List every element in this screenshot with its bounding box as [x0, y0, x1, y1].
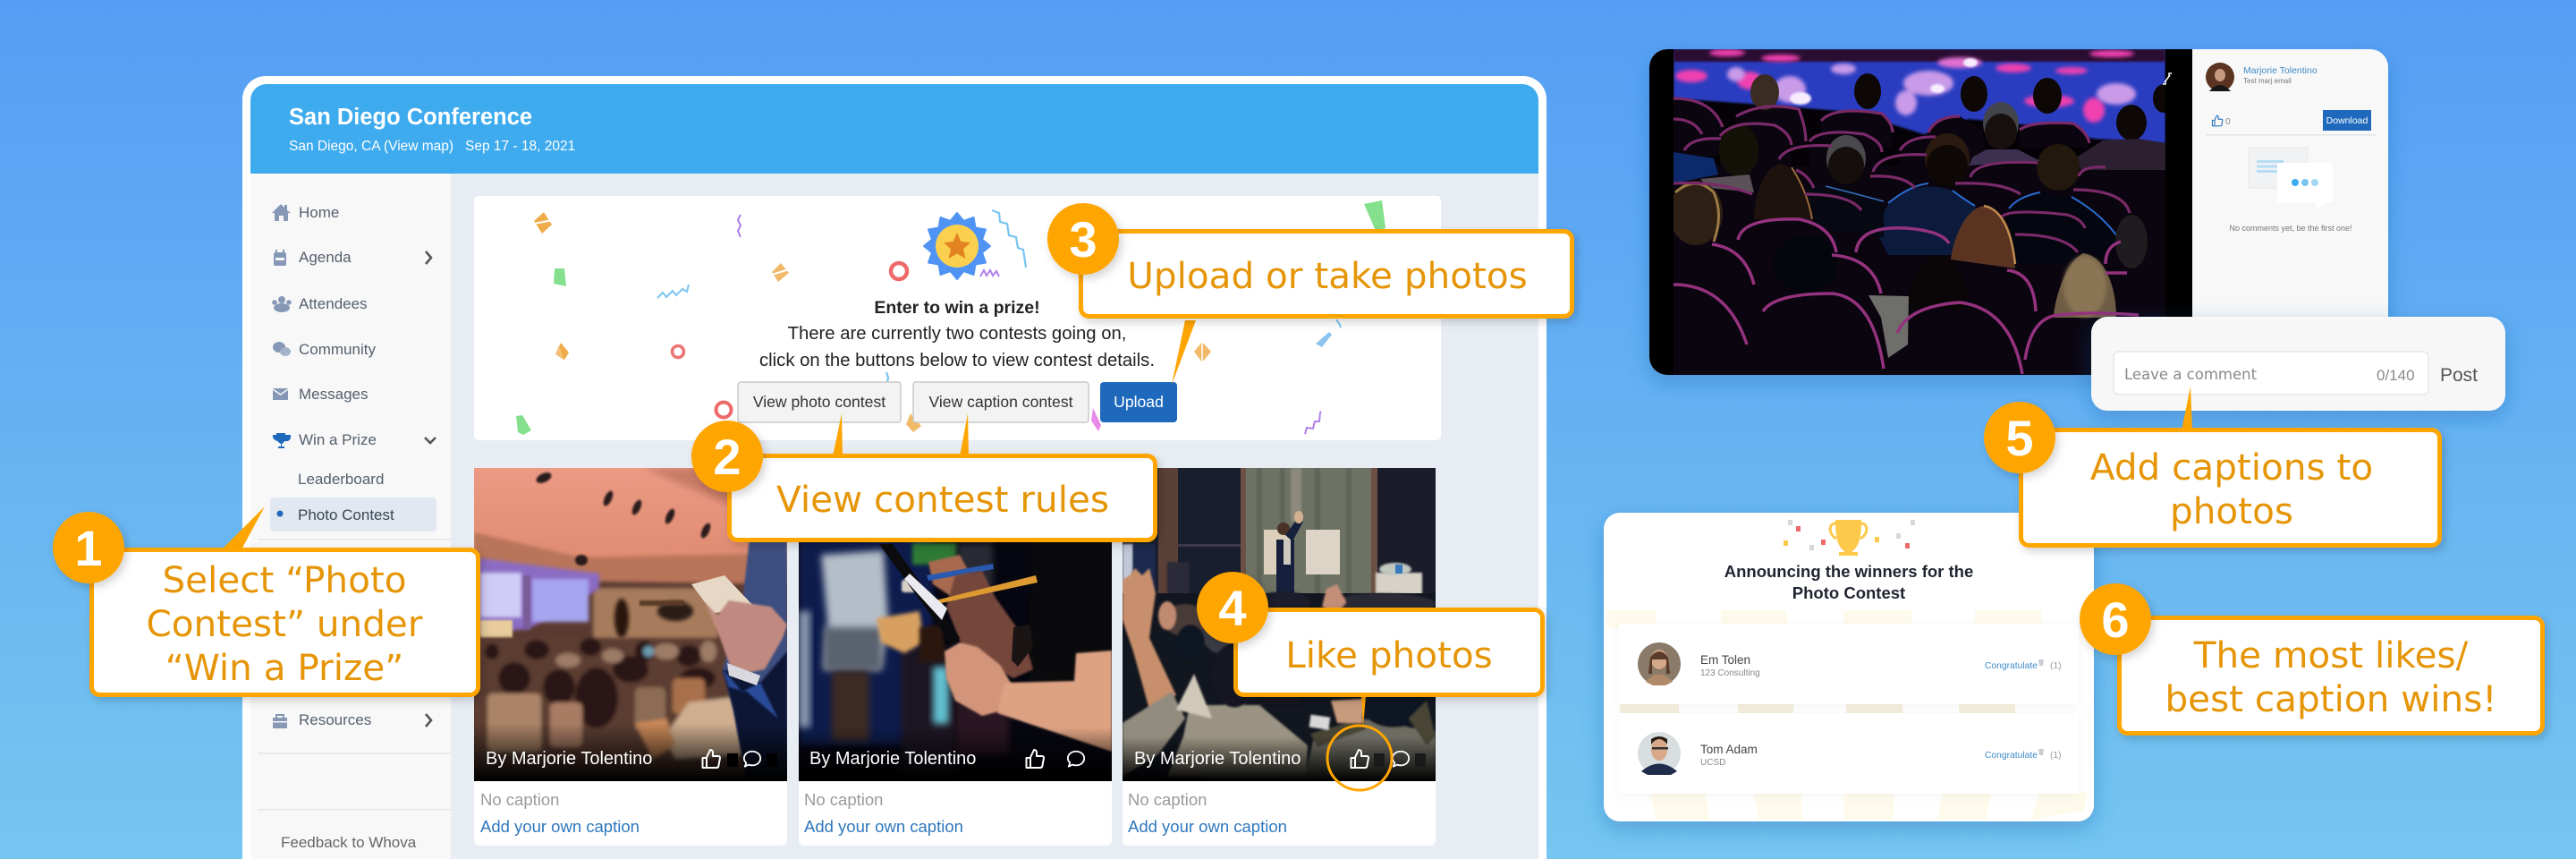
long hair and near heads: [1754, 164, 1812, 221]
photo: audience in theatre: [1674, 49, 2165, 375]
viewer sidebar: Marjorie Tolentino: [2243, 65, 2318, 76]
sidebar navigation: Attendees: [299, 295, 368, 312]
callout 2: view contest rules: [691, 413, 1156, 540]
panel: comment box: Leave a comment: [2124, 366, 2258, 383]
callout 3: upload or take photos: Upload or take photos: [1127, 254, 1528, 297]
callout 1: select photo contest: [53, 506, 478, 694]
sidebar navigation: Resources: [299, 711, 371, 728]
credit and actions: [1134, 749, 1426, 769]
viewer sidebar: 0: [2225, 117, 2231, 127]
icon: prize badge: [924, 213, 990, 279]
panel: conference app window: [242, 76, 1546, 859]
callout 4: like photos: [1197, 572, 1542, 790]
icon: trophy with confetti: [1784, 520, 1915, 556]
avatar: [1638, 732, 1681, 775]
winner row: Tom Adam: Congratulate: [1985, 751, 2038, 761]
callout 1: select photo contest: 1: [74, 520, 103, 576]
photo: writing on a clipboard: [799, 542, 1112, 781]
panel: photo viewer: [1649, 49, 2388, 375]
avatar: [1638, 642, 1681, 685]
callout 6: most likes wins: 6: [2101, 591, 2130, 648]
heads back rows: [1854, 73, 2174, 140]
photo card 3: Add your own caption: [1128, 817, 1287, 836]
callout 4: like photos: 4: [1218, 580, 1247, 636]
photo card 1: Add your own caption: [480, 817, 640, 836]
callout 5: add captions: photos: [2170, 489, 2293, 532]
shoulders: [1879, 186, 1978, 255]
sidebar navigation: Leaderboard: [298, 471, 384, 488]
button: view caption contest: View caption contest: [928, 393, 1073, 411]
seat arcs: [1674, 98, 2130, 252]
credit and actions: By Marjorie Tolentino: [809, 749, 976, 769]
photo card 3: No caption: [1128, 790, 1207, 809]
callout 2: view contest rules: View contest rules: [776, 478, 1109, 521]
app header: [250, 84, 1538, 174]
credit and actions: By Marjorie Tolentino: [1134, 749, 1301, 769]
heading: Announcing the winners for the: [1724, 562, 1973, 581]
sidebar navigation: Home: [299, 204, 339, 221]
winner row: Tom Adam: Tom Adam: [1700, 743, 1758, 756]
button: upload: Upload: [1114, 393, 1164, 411]
avatar: [2206, 63, 2234, 91]
callout 4: like photos: Like photos: [1285, 634, 1493, 676]
viewer sidebar: [2206, 63, 2377, 233]
photo card 1: No caption: [480, 790, 559, 809]
credit and actions: [809, 749, 1084, 769]
viewer sidebar: Test marj email: [2243, 77, 2292, 85]
photo: conference hall with phone: [474, 468, 787, 781]
callout 3: upload or take photos: [1047, 203, 1572, 385]
winner row: Tom Adam: [1619, 713, 2079, 794]
app header: San Diego, CA (View map): [289, 139, 453, 154]
panel: comment box: [2091, 317, 2505, 411]
decorative stripes: [1606, 610, 2088, 820]
sidebar navigation: Agenda: [299, 249, 352, 266]
callout 1: select photo contest: Contest” under: [147, 602, 423, 645]
app content background: [250, 170, 1538, 859]
winner row: Em Tolen: (1): [2050, 661, 2062, 671]
callout 5: add captions: 5: [2005, 410, 2034, 466]
winner row: Tom Adam: UCSD: [1700, 758, 1725, 768]
viewer sidebar: No comments yet, be the first one!: [2229, 224, 2352, 233]
contest text: click on the buttons below to view contest details.: [759, 351, 1155, 370]
heading: Photo Contest: [1792, 583, 1905, 602]
button: view caption contest: [913, 382, 1089, 422]
credit and actions: By Marjorie Tolentino: [486, 749, 652, 769]
photo card 2: No caption: [804, 790, 883, 809]
button: view photo contest: [738, 382, 901, 422]
sidebar navigation: [250, 174, 451, 859]
sidebar navigation: Photo Contest: [298, 506, 394, 523]
button: view photo contest: View photo contest: [753, 393, 886, 411]
winner row: Em Tolen: Congratulate: [1985, 661, 2038, 671]
winner row: Em Tolen: [1619, 624, 2079, 704]
contest text: Enter to win a prize!: [874, 298, 1040, 318]
sidebar navigation: Messages: [299, 386, 368, 403]
winner row: Tom Adam: (1): [2050, 751, 2062, 761]
illustration: empty comments: [2249, 148, 2333, 209]
panel: winners announcement: [1604, 513, 2094, 821]
contest text: [759, 298, 1155, 370]
sidebar navigation: Feedback to Whova: [281, 834, 417, 851]
contest text: There are currently two contests going on,: [788, 324, 1126, 344]
photo card 2: Add your own caption: [804, 817, 963, 836]
callout 5: add captions: Add captions to: [2090, 446, 2373, 489]
button: upload: [1100, 382, 1177, 422]
winner row: Em Tolen: Em Tolen: [1700, 653, 1750, 667]
callout 2: view contest rules: 2: [713, 429, 741, 485]
distant rows: [1674, 98, 2165, 375]
panel: contest banner: [474, 196, 1441, 440]
callout 6: most likes wins: [2080, 583, 2542, 734]
sidebar navigation: Community: [299, 341, 376, 358]
winner row: Em Tolen: 123 Consulting: [1700, 668, 1760, 678]
callout 3: upload or take photos: 3: [1069, 211, 1097, 268]
callout 1: select photo contest: Select “Photo: [162, 558, 407, 601]
panel: comment box: Post: [2440, 365, 2478, 386]
photo card 1: [474, 468, 787, 846]
app header: San Diego Conference: [289, 105, 532, 130]
photo: speaker and raised hands: [1123, 468, 1436, 781]
confetti: [516, 200, 1385, 435]
icon: expand: [2163, 73, 2172, 84]
app header: Sep 17 - 18, 2021: [465, 139, 575, 154]
heading: [1724, 562, 1973, 602]
callout 5: add captions: [1984, 387, 2440, 546]
sidebar navigation: Win a Prize: [299, 431, 377, 448]
panel: comment box: 0/140: [2377, 367, 2415, 384]
photo card 2: [799, 468, 1112, 846]
credit and actions: [486, 749, 777, 769]
callout 6: most likes wins: best caption wins!: [2165, 677, 2497, 720]
viewer sidebar: Download: [2326, 115, 2368, 126]
callout 6: most likes wins: The most likes/: [2193, 634, 2469, 676]
photo card 3: [1123, 468, 1436, 846]
paper: [1868, 295, 1909, 358]
callout 1: select photo contest: “Win a Prize”: [165, 646, 403, 689]
